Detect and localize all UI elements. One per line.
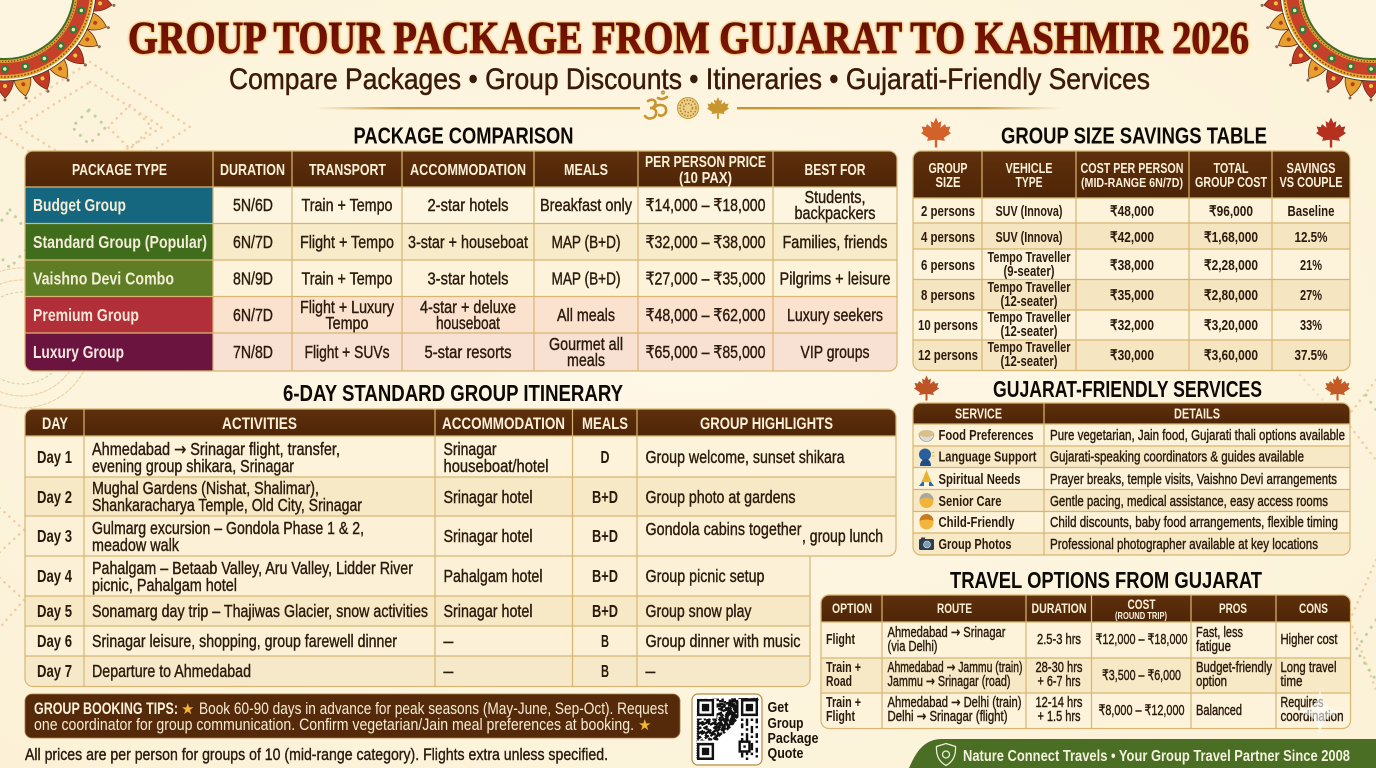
row: Language Support: Language Support: [938, 450, 1037, 466]
QR caption: Get: [768, 699, 788, 716]
table header: MEALS: [564, 162, 608, 179]
row: Day 1: Group welcome, sunset shikara: [646, 447, 845, 467]
row: Day 3: B+D: [592, 526, 618, 546]
corner mandala: top right: [1259, 0, 1376, 102]
icon: senior face: [920, 493, 934, 508]
row: 10 persons: 33%: [1300, 318, 1322, 334]
row: 10 persons: [914, 311, 1322, 339]
row: 8 persons: 27%: [1300, 288, 1322, 304]
row: 6 persons: 21%: [1300, 258, 1322, 274]
row: 2 persons: SUV (Innova): [996, 204, 1063, 220]
icon: wheel: [678, 98, 698, 118]
row: Train + Road: option: [1196, 674, 1227, 690]
row: Day 1: evening group shikara, Srinagar: [92, 456, 294, 476]
row: Day 3: Srinagar hotel: [444, 526, 532, 546]
row: Premium Group: 6N/7D: [233, 305, 273, 325]
callout: group booking tips: ★: [638, 716, 651, 734]
travel header: OPTION: [832, 601, 872, 616]
row: 4 persons: SUV (Innova): [996, 230, 1063, 246]
heading: package comparison: PACKAGE COMPARISON: [354, 122, 574, 148]
savings header: SAVINGS: [1286, 161, 1336, 177]
row: Luxury Group: Flight + SUVs: [304, 342, 390, 362]
row: 2 persons: Baseline: [1288, 204, 1334, 220]
panel: Gujarat-friendly services table: [913, 403, 1350, 555]
travel header: PROS: [1219, 601, 1247, 616]
itinerary header: ACCOMMODATION: [442, 415, 565, 433]
row: Vaishno Devi Combo: [25, 260, 897, 296]
row: Day 1: houseboat/hotel: [444, 456, 548, 476]
row: Day 2: Day 2: [37, 487, 72, 507]
row: Day 5: [25, 596, 810, 626]
row: Spiritual Needs: Spiritual Needs: [938, 472, 1020, 488]
savings header: GROUP COST: [1195, 175, 1267, 191]
row: Day 1: Ahmedabad → Srinagar flight, transfer,: [92, 439, 340, 460]
table header: PACKAGE TYPE: [72, 162, 167, 179]
QR code: [692, 694, 762, 765]
row: Day 6: Day 6: [37, 631, 72, 651]
row: Train + Road: [821, 658, 1351, 693]
row: Train + Road: Ahmedabad → Jammu (train): [888, 660, 1022, 676]
row: Day 4: Day 4: [37, 566, 72, 586]
icon: food bowl: [919, 430, 934, 442]
savings header: [913, 151, 1350, 198]
heading: group size savings: GROUP SIZE SAVINGS TABLE: [1001, 122, 1267, 148]
row: Flight: Higher cost: [1280, 632, 1338, 648]
icon: left services maple leaf: [914, 376, 939, 400]
row: Day 1: [25, 436, 897, 477]
table header: (10 PAX): [679, 170, 732, 187]
row: Day 3: meadow walk: [92, 535, 179, 555]
row: 4 persons: 12.5%: [1294, 230, 1328, 246]
row: Flight: fatigue: [1196, 639, 1231, 655]
row: Train + Road: Budget-friendly: [1196, 660, 1273, 676]
row: Day 4: Pahalgam hotel: [444, 566, 542, 586]
row: Train + Flight: Requires: [1280, 695, 1324, 711]
sparkle: [1296, 688, 1344, 736]
table header: [25, 151, 897, 187]
row: Vaishno Devi Combo: ₹27,000 – ₹35,000: [646, 268, 766, 288]
row: Flight: Fast, less: [1196, 625, 1243, 641]
row: Day 2: Shankaracharya Temple, Old City, Srinagar: [92, 495, 362, 515]
table header: ACCOMMODATION: [410, 162, 526, 179]
row: Vaishno Devi Combo: MAP (B+D): [552, 268, 620, 288]
row: Food Preferences: [913, 424, 1350, 446]
row: Train + Road: Long travel: [1280, 660, 1336, 676]
icon: child face: [920, 514, 934, 530]
savings header: TYPE: [1016, 175, 1043, 191]
row: 4 persons: [913, 223, 1350, 249]
table header: DURATION: [220, 162, 285, 179]
row: Premium Group: All meals: [557, 305, 615, 325]
row: Luxury Group: 5-star resorts: [424, 342, 512, 362]
row: Luxury Group: ₹65,000 – ₹85,000: [646, 342, 766, 362]
row: Day 5: Srinagar hotel: [444, 601, 532, 621]
row: Day 3: Gulmarg excursion – Gondola Phase 1 & 2,: [92, 518, 364, 538]
savings header: SIZE: [936, 175, 961, 191]
row: Day 6: B: [601, 631, 609, 651]
callout: group booking tips: Book 60-90 days in advance for peak seasons (May-June, Sep-Oct). Request: [199, 700, 668, 718]
row: Standard Group: Families, friends: [782, 232, 888, 252]
row: Day 3: [25, 516, 897, 556]
row: Language Support: [913, 446, 1350, 468]
row: Flight: Ahmedabad → Srinagar: [888, 625, 1006, 641]
row: Day 1: Srinagar: [444, 439, 497, 459]
row: Flight: [821, 622, 1351, 658]
row: Train + Flight: 12-14 hrs: [1036, 695, 1082, 711]
row: Train + Road: time: [1280, 674, 1302, 690]
row: Day 7: –: [646, 661, 656, 681]
row: 2 persons: ₹96,000: [1209, 204, 1253, 220]
row: 6 persons: Tempo Traveller: [988, 250, 1071, 266]
row: Day 7: –: [444, 661, 454, 681]
savings header: VS COUPLE: [1280, 175, 1343, 191]
row: Day 7: Departure to Ahmedabad: [92, 661, 251, 681]
row: Language Support: Gujarati-speaking coordinators & guides available: [1050, 450, 1304, 466]
icon: praying hands: [919, 470, 934, 486]
row: 4 persons: 4 persons: [921, 230, 975, 246]
row: 12 persons: ₹3,60,000: [1204, 348, 1258, 364]
row: Day 2: [25, 477, 897, 516]
row: Train + Road: 28-30 hrs: [1036, 660, 1082, 676]
row: Budget Group: [25, 187, 897, 224]
row: Premium Group: Tempo: [326, 313, 368, 333]
row: 10 persons: Tempo Traveller: [988, 310, 1071, 326]
row: Day 2: B+D: [592, 487, 618, 507]
row: Vaishno Devi Combo: Train + Tempo: [302, 268, 392, 288]
corner mandala: top left: [0, 0, 117, 102]
row: 10 persons: ₹3,20,000: [1204, 318, 1258, 334]
panel: group size savings table: [913, 151, 1350, 371]
panel: package comparison table: [25, 151, 897, 371]
row: 12 persons: 12 persons: [918, 348, 978, 364]
panel: travel options table: [821, 595, 1351, 736]
row: Standard Group: MAP (B+D): [552, 232, 620, 252]
QR caption: Package: [768, 730, 818, 747]
itinerary header: ACTIVITIES: [222, 415, 297, 433]
row: Day 4: B+D: [592, 566, 618, 586]
row: 6 persons: (9-seater): [1004, 264, 1055, 280]
row: Child-Friendly: Child-Friendly: [938, 515, 1014, 531]
savings header: GROUP: [928, 161, 968, 177]
row: Day 5: B+D: [592, 601, 618, 621]
row: Group Photos: [913, 533, 1350, 555]
row: 8 persons: Tempo Traveller: [988, 280, 1071, 296]
row: Train + Road: Road: [826, 674, 852, 690]
row: 2 persons: ₹48,000: [1110, 204, 1154, 220]
icon: right services maple leaf: [1325, 376, 1350, 400]
itinerary header: MEALS: [582, 415, 628, 433]
row: 8 persons: ₹35,000: [1110, 288, 1154, 304]
services header: SERVICE: [955, 406, 1002, 422]
row: 12 persons: 37.5%: [1294, 348, 1328, 364]
savings header: COST PER PERSON: [1080, 161, 1184, 177]
icon: gold maple leaf: [707, 97, 729, 119]
itinerary header: DAY: [42, 415, 68, 433]
savings header: (MID-RANGE 6N/7D): [1081, 176, 1183, 190]
table header: PER PERSON PRICE: [645, 154, 766, 171]
row: Senior Care: [913, 490, 1350, 512]
row: Budget Group: Train + Tempo: [302, 195, 392, 215]
row: Train + Road: Train +: [826, 660, 861, 676]
row: Premium Group: [25, 296, 897, 333]
row: Standard Group: [25, 224, 897, 260]
row: 8 persons: [913, 280, 1350, 310]
QR caption: [768, 699, 818, 762]
row: Group Photos: Group Photos: [938, 537, 1012, 553]
row: Day 1: D: [600, 447, 610, 467]
icon: speaking head: [919, 448, 934, 466]
row: Day 4: Pahalgam – Betaab Valley, Aru Valley, Lidder River: [92, 558, 413, 578]
row: Train + Flight: ₹8,000 – ₹12,000: [1098, 703, 1184, 719]
row: 8 persons: 8 persons: [921, 288, 975, 304]
row: Luxury Group: Luxury Group: [33, 342, 124, 362]
row: Senior Care: Senior Care: [938, 494, 1002, 510]
row: Premium Group: Premium Group: [33, 305, 139, 325]
heading: travel options: TRAVEL OPTIONS FROM GUJARAT: [950, 567, 1262, 593]
row: 10 persons: (12-seater): [1000, 324, 1058, 340]
row: Train + Flight: Flight: [826, 709, 855, 725]
row: Day 2: Mughal Gardens (Nishat, Shalimar),: [92, 478, 319, 498]
row: Budget Group: backpackers: [794, 203, 876, 223]
row: Standard Group: Standard Group (Popular): [33, 232, 207, 252]
row: 2 persons: 2 persons: [921, 204, 975, 220]
row: Train + Flight: Delhi → Srinagar (flight): [888, 709, 1008, 725]
row: Day 6: [25, 626, 810, 656]
table header: TRANSPORT: [309, 162, 386, 179]
row: 6 persons: ₹38,000: [1110, 258, 1154, 274]
row: Train + Flight: Train +: [826, 695, 861, 711]
row: 8 persons: ₹2,80,000: [1204, 288, 1258, 304]
row: Train + Flight: Balanced: [1196, 703, 1242, 719]
row: Day 5: Day 5: [37, 601, 72, 621]
row: Day 2: Group photo at gardens: [646, 487, 796, 507]
footnote: All prices are per person for groups of 10 (mid-range category). Flights extra unless specified.: [25, 745, 608, 764]
row: Train + Road: ₹3,500 – ₹6,000: [1102, 668, 1181, 684]
row: Budget Group: ₹14,000 – ₹18,000: [646, 195, 766, 215]
row: 4 persons: ₹1,68,000: [1204, 230, 1258, 246]
row: Day 5: Group snow play: [646, 601, 752, 621]
row: Day 6: Srinagar leisure, shopping, group farewell dinner: [92, 631, 397, 651]
row: 6 persons: ₹2,28,000: [1204, 258, 1258, 274]
services header: DETAILS: [1174, 406, 1220, 422]
icon: red maple leaf: [1316, 118, 1346, 148]
row: 12 persons: [913, 340, 1350, 370]
row: 6 persons: 6 persons: [921, 258, 975, 274]
icon: orange maple leaf: [921, 118, 951, 148]
row: Day 4: Group picnic setup: [646, 566, 764, 586]
travel header: [821, 595, 1351, 622]
row: Day 4: [25, 556, 810, 596]
row: Luxury Group: VIP groups: [800, 342, 870, 362]
QR caption: Group: [768, 715, 804, 732]
row: Day 3: Day 3: [37, 526, 72, 546]
row: Vaishno Devi Combo: Pilgrims + leisure: [780, 268, 890, 288]
travel header: (ROUND TRIP): [1115, 611, 1167, 622]
callout: group booking tips: [25, 694, 680, 738]
travel header: ROUTE: [937, 601, 972, 616]
row: Day 7: Day 7: [37, 661, 72, 681]
QR caption: Quote: [768, 745, 804, 762]
row: Budget Group: Students,: [804, 187, 866, 207]
row: 12 persons: (12-seater): [1000, 354, 1058, 370]
row: Train + Road: + 6-7 hrs: [1038, 674, 1080, 690]
travel header: DURATION: [1032, 601, 1086, 616]
row: Day 3: Gondola cabins together: [646, 519, 802, 539]
row: Luxury Group: 7N/8D: [233, 342, 273, 362]
row: Standard Group: 3-star + houseboat: [408, 232, 528, 252]
row: Flight: ₹12,000 – ₹18,000: [1096, 632, 1188, 648]
row: Budget Group: Budget Group: [33, 195, 126, 215]
itinerary header: [25, 409, 897, 436]
savings header: TOTAL: [1214, 161, 1249, 177]
row: Train + Flight: Ahmedabad → Delhi (train): [888, 695, 1022, 711]
table header: BEST FOR: [804, 162, 866, 179]
row: Day 4: picnic, Pahalgam hotel: [92, 575, 237, 595]
row: Budget Group: 5N/6D: [233, 195, 273, 215]
row: Day 3: , group lunch: [802, 526, 883, 546]
row: Train + Flight: coordination: [1280, 709, 1344, 725]
ornamental divider: [315, 92, 1062, 119]
row: Food Preferences: Food Preferences: [938, 428, 1034, 444]
callout: group booking tips: GROUP BOOKING TIPS:: [34, 700, 178, 718]
row: Premium Group: Flight + Luxury: [300, 297, 394, 317]
row: 6 persons: [914, 250, 1322, 279]
row: Child-Friendly: [920, 514, 1338, 530]
travel header: COST: [1128, 597, 1156, 612]
footer banner: [909, 739, 1376, 768]
icon: shield logo: [936, 744, 956, 766]
row: Day 1: Day 1: [37, 447, 72, 467]
row: Day 6: Group dinner with music: [646, 631, 801, 651]
heading: itinerary: 6-DAY STANDARD GROUP ITINERARY: [283, 380, 623, 406]
row: Spiritual Needs: [914, 468, 1337, 488]
row: Premium Group: 4-star + deluxe: [420, 297, 516, 317]
callout: group booking tips: one coordinator for group communication. Confirm vegetarian/Jain meal preferences at booking.: [34, 716, 634, 734]
row: Standard Group: ₹32,000 – ₹38,000: [646, 232, 766, 252]
row: Group Photos: Professional photographer available at key locations: [1050, 537, 1318, 553]
itinerary header: GROUP HIGHLIGHTS: [700, 415, 833, 433]
row: Vaishno Devi Combo: 3-star hotels: [428, 268, 509, 288]
row: 4 persons: ₹42,000: [1110, 230, 1154, 246]
row: Budget Group: 2-star hotels: [428, 195, 509, 215]
row: Standard Group: 6N/7D: [233, 232, 273, 252]
subtitle: Compare Packages • Group Discounts • Itineraries • Gujarati-Friendly Services: [229, 63, 1150, 96]
row: 10 persons: ₹32,000: [1110, 318, 1154, 334]
travel header: CONS: [1299, 601, 1328, 616]
row: Flight: Flight: [826, 632, 855, 648]
row: Premium Group: ₹48,000 – ₹62,000: [646, 305, 766, 325]
row: 2 persons: [914, 203, 1334, 222]
row: Luxury Group: meals: [567, 350, 605, 370]
row: Flight: 2.5-3 hrs: [1037, 632, 1081, 648]
row: Vaishno Devi Combo: Vaishno Devi Combo: [33, 268, 174, 288]
row: Flight: (via Delhi): [888, 639, 938, 655]
row: Day 7: B: [601, 661, 609, 681]
row: Day 5: Sonamarg day trip – Thajiwas Glacier, snow activities: [92, 601, 428, 621]
row: Standard Group: Flight + Tempo: [300, 232, 394, 252]
row: Day 2: Srinagar hotel: [444, 487, 532, 507]
row: Day 6: –: [444, 631, 454, 651]
row: Train + Road: Jammu → Srinagar (road): [888, 674, 1010, 690]
icon: om symbol: [645, 92, 667, 118]
row: Vaishno Devi Combo: 8N/9D: [233, 268, 273, 288]
savings header: VEHICLE: [1006, 161, 1053, 177]
row: Luxury Group: [25, 333, 897, 371]
row: 12 persons: ₹30,000: [1110, 348, 1154, 364]
row: Train + Flight: [821, 693, 1351, 729]
row: Premium Group: houseboat: [436, 313, 500, 333]
services header: [913, 403, 1350, 424]
row: 12 persons: Tempo Traveller: [988, 340, 1071, 356]
row: Day 7: [25, 656, 810, 687]
heading: Gujarat-friendly services: GUJARAT-FRIENDLY SERVICES: [993, 376, 1262, 402]
row: 10 persons: 10 persons: [918, 318, 978, 334]
row: Luxury Group: Gourmet all: [549, 334, 623, 354]
row: Train + Flight: + 1.5 hrs: [1038, 709, 1080, 725]
panel: itinerary table: [25, 409, 897, 687]
row: Budget Group: Breakfast only: [540, 195, 632, 215]
row: Premium Group: Luxury seekers: [787, 305, 883, 325]
callout: group booking tips: ★: [181, 700, 194, 718]
row: 8 persons: (12-seater): [1000, 294, 1058, 310]
icon: camera: [919, 538, 934, 550]
